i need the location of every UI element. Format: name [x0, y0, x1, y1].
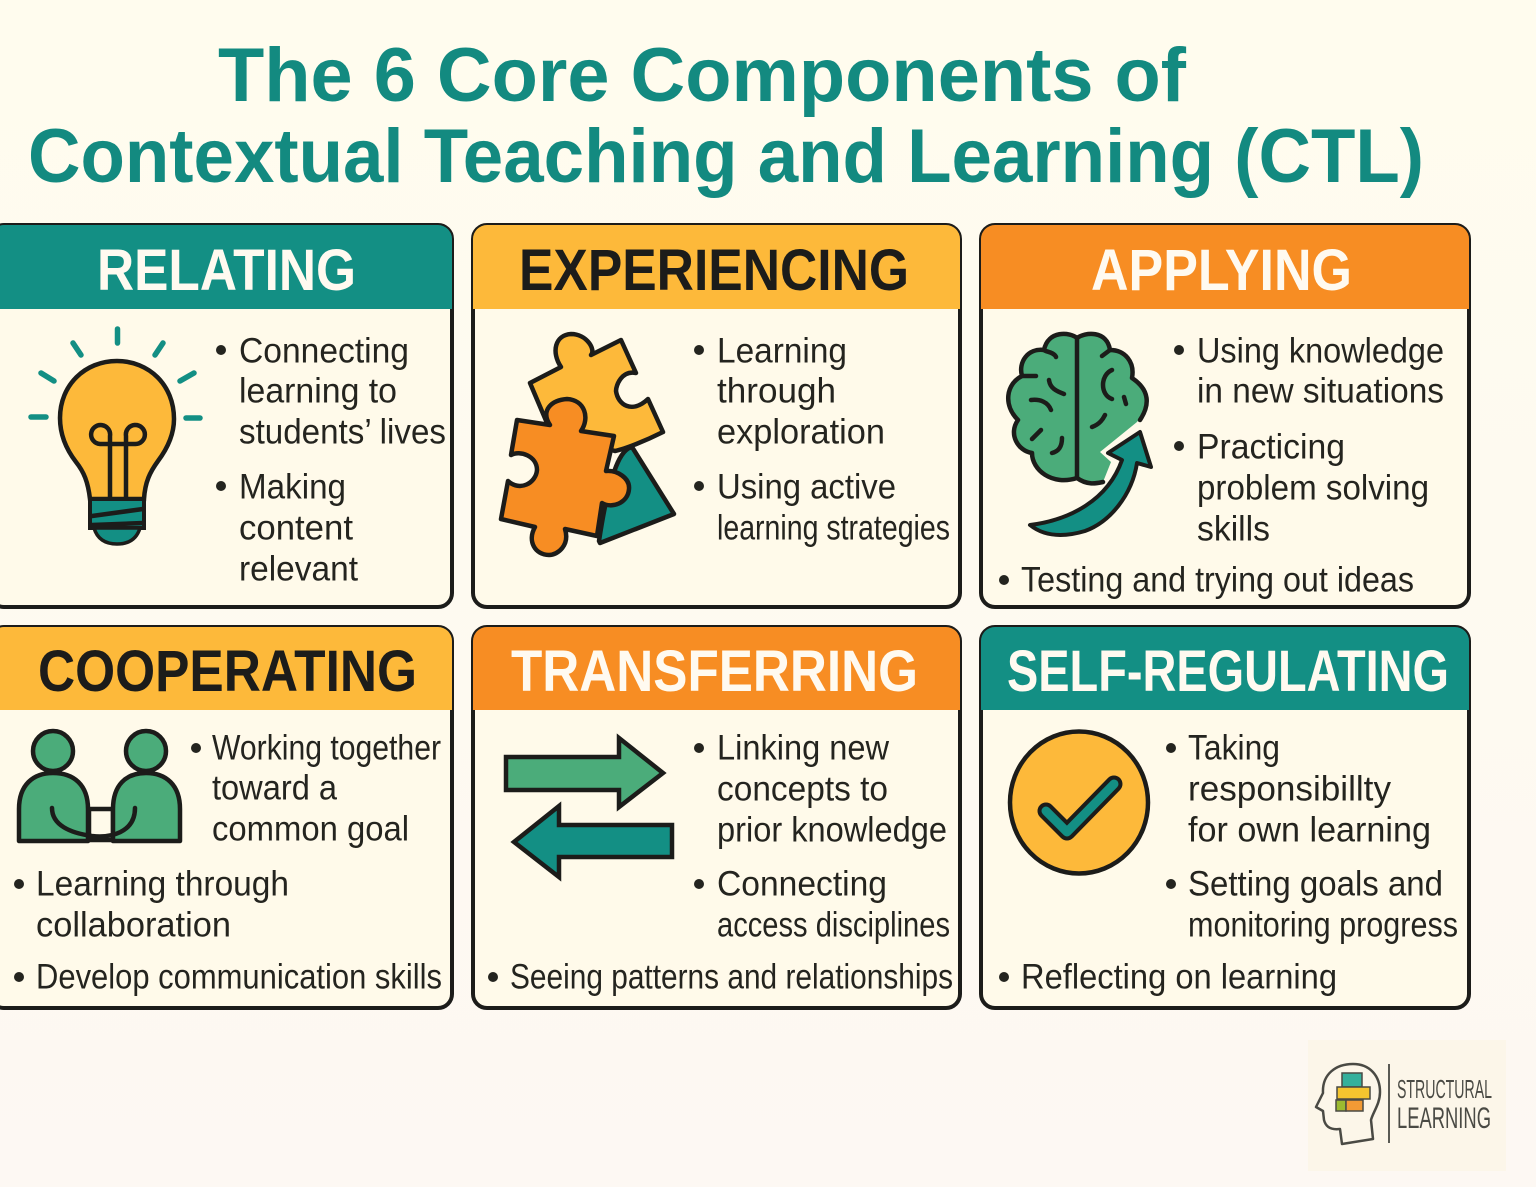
applying header: APPLYING — [1091, 238, 1352, 303]
experiencing header: EXPERIENCING — [519, 238, 909, 303]
title: The 6 Core Components of — [218, 33, 1187, 118]
experiencing bullets: learning strategies — [717, 508, 950, 547]
transferring bullets: Seeing patterns and relationships — [510, 957, 953, 996]
transferring bullets: concepts to — [717, 769, 888, 808]
logo: structural learning — [1308, 1040, 1506, 1171]
relating bullets: content — [239, 508, 353, 547]
self-regulating bullets: Setting goals and — [1188, 864, 1443, 903]
transferring bullets: access disciplines — [717, 905, 950, 944]
relating bullets: Making — [239, 467, 346, 506]
applying bullets: in new situations — [1197, 371, 1444, 410]
relating header — [0, 225, 452, 309]
relating bullets: students’ lives — [239, 412, 446, 451]
transferring bullets — [488, 728, 953, 996]
relating bullets: relevant — [239, 549, 358, 588]
relating bullets: Connecting — [239, 331, 409, 370]
applying bullets — [999, 331, 1444, 599]
icon: check mark — [1010, 732, 1148, 874]
self-regulating header — [981, 627, 1469, 710]
title — [28, 33, 1424, 199]
icon: puzzle pieces — [501, 334, 674, 555]
experiencing bullets: Learning — [717, 331, 847, 370]
cooperating bullets: common goal — [212, 809, 409, 848]
icon: head with blocks — [1316, 1064, 1380, 1144]
title: Contextual Teaching and Learning (CTL) — [28, 114, 1424, 199]
panel: relating — [0, 225, 452, 607]
cooperating bullets: Working together — [212, 728, 441, 767]
icon: brain with arrow — [1008, 334, 1151, 535]
transferring bullets: Linking new — [717, 728, 890, 767]
panel: experiencing — [473, 225, 960, 607]
self-regulating bullets: responsibillty — [1188, 769, 1391, 808]
relating bullets — [216, 331, 446, 588]
transferring bullets: prior knowledge — [717, 810, 947, 849]
experiencing bullets: exploration — [717, 412, 885, 451]
panel: cooperating — [0, 627, 452, 1008]
icon: light bulb — [31, 329, 200, 544]
experiencing bullets — [694, 331, 950, 547]
applying bullets: Practicing — [1197, 427, 1345, 466]
cooperating bullets: collaboration — [36, 905, 231, 944]
self-regulating bullets — [999, 728, 1458, 996]
cooperating header: COOPERATING — [38, 639, 417, 704]
applying bullets: Using knowledge — [1197, 331, 1444, 370]
relating bullets: learning to — [239, 371, 397, 410]
applying bullets: problem solving — [1197, 468, 1429, 507]
self-regulating bullets: monitoring progress — [1188, 905, 1458, 944]
applying header — [981, 225, 1469, 309]
applying bullets: Testing and trying out ideas — [1021, 560, 1414, 599]
cooperating bullets — [14, 728, 442, 996]
transferring header: TRANSFERRING — [511, 639, 918, 704]
panel: applying — [981, 225, 1469, 607]
self-regulating bullets: for own learning — [1188, 810, 1431, 849]
icon: two people — [19, 731, 180, 841]
cooperating bullets: Develop communication skills — [36, 957, 442, 996]
applying bullets: skills — [1197, 509, 1270, 548]
experiencing bullets: through — [717, 371, 836, 410]
icon: exchange arrows — [506, 738, 672, 877]
relating header: RELATING — [97, 238, 356, 303]
experiencing header — [473, 225, 960, 309]
self-regulating bullets: Taking — [1188, 728, 1280, 767]
transferring bullets: Connecting — [717, 864, 887, 903]
experiencing bullets: Using active — [717, 467, 896, 506]
panel: self-regulating — [981, 627, 1469, 1008]
self-regulating bullets: Reflecting on learning — [1021, 957, 1337, 996]
cooperating bullets: Learning through — [36, 864, 289, 903]
cooperating bullets: toward a — [212, 768, 337, 807]
panel: transferring — [473, 627, 960, 1008]
